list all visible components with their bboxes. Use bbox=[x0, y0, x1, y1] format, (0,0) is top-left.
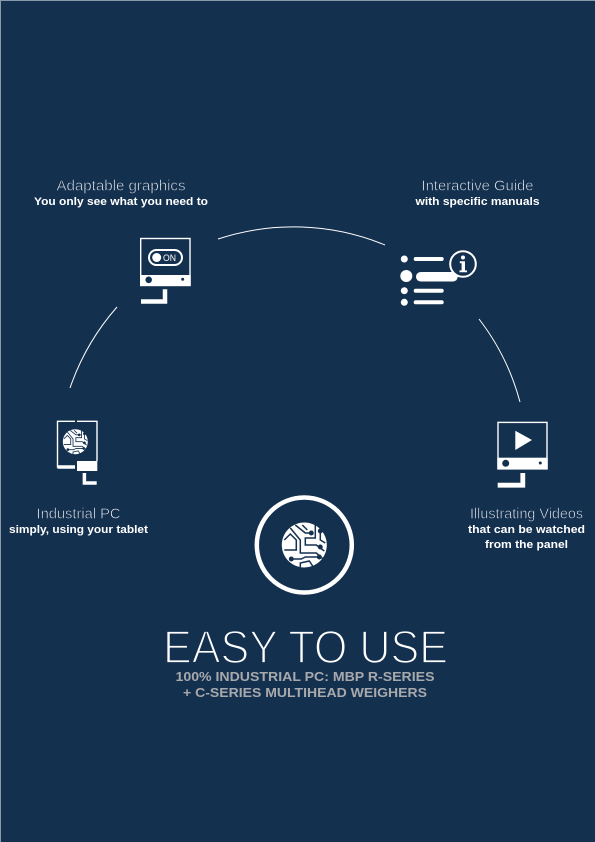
icon: tablet with circuit bbox=[58, 421, 97, 483]
feature: illustrating videos heading: that can be watched bbox=[468, 524, 585, 536]
feature: industrial pc heading bbox=[9, 506, 148, 536]
feature: illustrating videos heading: from the panel bbox=[485, 539, 568, 551]
subtitle: + C-SERIES MULTIHEAD WEIGHERS bbox=[183, 686, 427, 700]
subtitle: 100% INDUSTRIAL PC: MBP R-SERIES bbox=[176, 670, 434, 684]
feature: interactive guide heading: Interactive Guide bbox=[422, 178, 534, 194]
feature: adaptable graphics heading bbox=[34, 178, 208, 208]
feature: adaptable graphics heading: Adaptable graphics bbox=[56, 178, 186, 194]
feature: industrial pc heading: Industrial PC bbox=[36, 506, 120, 522]
feature: interactive guide heading bbox=[414, 178, 540, 208]
icon: monitor with on toggle: ON bbox=[163, 253, 176, 264]
feature: illustrating videos heading: Illustrating Videos bbox=[470, 506, 583, 522]
icon: monitor with on toggle bbox=[140, 238, 191, 302]
feature: illustrating videos heading bbox=[468, 506, 585, 551]
feature: industrial pc heading: simply, using your tablet bbox=[9, 524, 148, 536]
feature: adaptable graphics heading: You only see what you need to bbox=[34, 196, 208, 208]
icon: central circuit badge bbox=[257, 498, 352, 592]
icon: monitor with play button bbox=[497, 422, 548, 485]
connecting arcs bbox=[70, 227, 520, 402]
feature: interactive guide heading: with specific manuals bbox=[414, 196, 540, 208]
icon: list with info badge bbox=[400, 251, 476, 306]
subtitle bbox=[176, 670, 434, 700]
title: EASY TO USE bbox=[163, 621, 448, 673]
